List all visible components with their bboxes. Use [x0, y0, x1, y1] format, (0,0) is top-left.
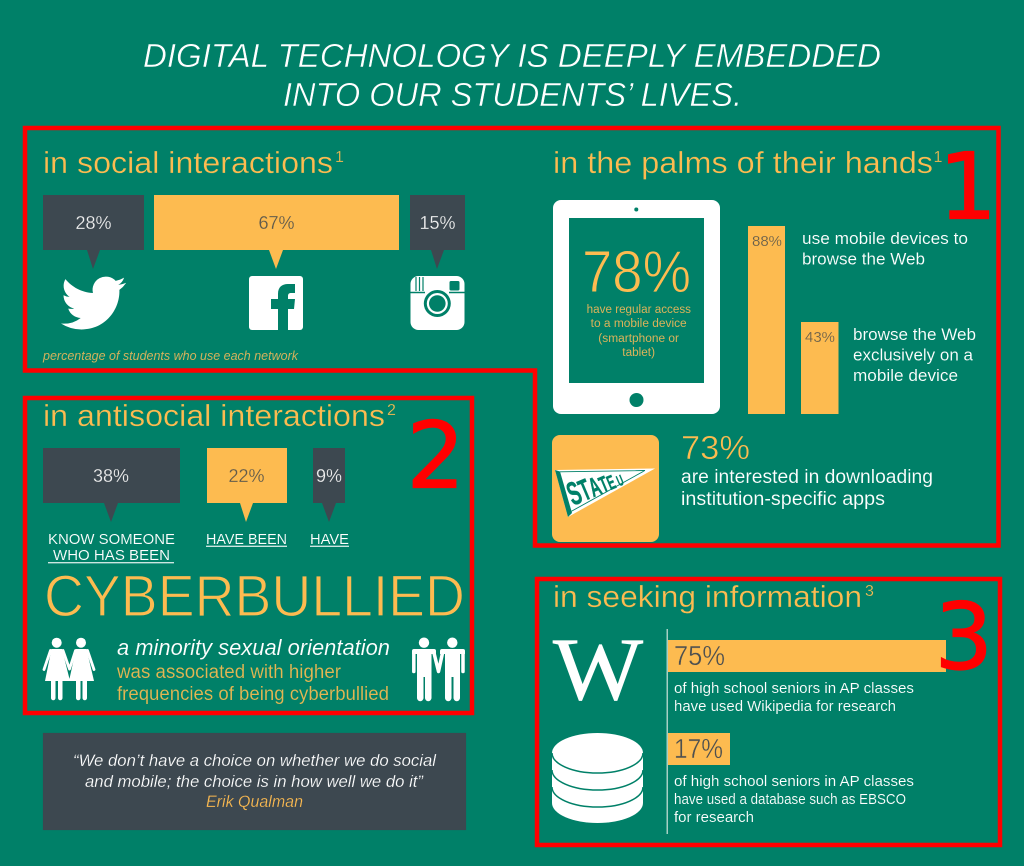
text: database stat: of high school seniors in AP classes: [674, 774, 914, 790]
quote box: and mobile; the choice is in how well we do it”: [85, 772, 424, 791]
bar: 75%: 75%: [674, 640, 725, 671]
text: browse exclusively: mobile device: [853, 366, 958, 385]
quote box: [43, 733, 466, 830]
bar: 88%: [748, 226, 785, 414]
text: browse exclusively: [853, 325, 976, 385]
heading: in social interactions: in social interactions: [43, 145, 333, 180]
text: database stat: have used a database such as EBSCO: [674, 792, 906, 808]
stat: 73% interested in apps: [681, 429, 933, 510]
footnote marker: 2: [387, 402, 396, 419]
icon: database: [552, 733, 643, 823]
quote box: “We don’t have a choice on whether we do social: [73, 751, 437, 770]
text: minority sexual orientation: a minority sexual orientation: [117, 635, 390, 660]
callout: facebook 67%: 67%: [258, 213, 295, 233]
panel: in seeking information: [552, 579, 946, 834]
icon: tablet with 78%: 78%: [582, 239, 691, 305]
annotation: number 2: 2: [406, 402, 465, 510]
text: minority sexual orientation: frequencies of being cyberbullied: [117, 684, 389, 705]
icon: tablet with 78%: tablet): [622, 347, 655, 359]
title: [143, 37, 881, 113]
label: know someone who has been: KNOW SOMEONE: [48, 531, 175, 548]
text: database stat: [674, 774, 914, 826]
title: INTO OUR STUDENTS’ LIVES.: [283, 76, 742, 113]
icon: facebook: [249, 276, 303, 330]
callout: facebook 67%: [154, 195, 399, 269]
stat: 73% interested in apps: are interested in downloading: [681, 466, 933, 488]
callout: 9%: [313, 448, 345, 522]
text: browse exclusively: exclusively on a: [853, 346, 974, 364]
panel: in the palms of their hands: [552, 145, 976, 542]
heading: in seeking information: in seeking information: [553, 579, 862, 614]
callout: 22%: [207, 448, 287, 522]
annotation: red outline 3: [537, 579, 1000, 845]
icon: tablet with 78%: have regular access: [587, 304, 691, 316]
panel: in social interactions: [42, 145, 465, 363]
text: use mobile devices: [802, 229, 968, 268]
quote box: Erik Qualman: [206, 793, 303, 811]
label: know someone who has been: [48, 531, 175, 564]
icon: two women: [44, 638, 94, 700]
icon: instagram: [410, 276, 464, 330]
callout: 38%: 38%: [93, 466, 129, 486]
stat: 73% interested in apps: institution-specific apps: [681, 488, 885, 510]
heading: in antisocial interactions: in antisocial interactions: [43, 398, 385, 433]
callout: 38%: [43, 448, 180, 522]
heading: cyberbullied: CYBERBULLIED: [44, 564, 465, 629]
caption: percentage of students: percentage of students who use each network: [42, 349, 299, 363]
bar: 43%: [801, 322, 838, 414]
icon: tablet with 78%: [553, 200, 720, 414]
panel: in antisocial interactions: [43, 398, 465, 705]
bar: 17%: 17%: [674, 733, 723, 764]
annotation: number 1: 1: [938, 134, 997, 240]
label: have been: HAVE BEEN: [206, 531, 287, 548]
title: DIGITAL TECHNOLOGY IS DEEPLY EMBEDDED: [143, 37, 881, 74]
footnote marker: 1: [335, 149, 344, 166]
icon: tablet with 78%: (smartphone or: [598, 333, 679, 345]
icon: twitter: [61, 277, 126, 329]
callout: instagram 15%: [410, 195, 465, 269]
callout: twitter 28%: 28%: [75, 213, 112, 233]
text: database stat: for research: [674, 810, 754, 826]
text: minority sexual orientation: [116, 635, 390, 705]
callout: instagram 15%: 15%: [419, 213, 456, 233]
text: use mobile devices: browse the Web: [802, 250, 925, 268]
text: minority sexual orientation: was associated with higher: [116, 662, 342, 683]
bar: 43%: 43%: [805, 329, 835, 346]
footnote marker: 1: [934, 149, 942, 166]
icon: tablet with 78%: to a mobile device: [591, 318, 687, 330]
text: browse exclusively: browse the Web: [853, 325, 976, 344]
text: Wikipedia stat: have used Wikipedia for research: [674, 699, 896, 715]
text: Wikipedia stat: [674, 681, 914, 715]
annotation: number 3: 3: [934, 584, 993, 690]
divider line: [666, 629, 668, 834]
callout: 22%: 22%: [228, 466, 265, 486]
icon: State U pennant: [552, 435, 659, 542]
callout: 9%: 9%: [316, 466, 342, 486]
bar: 88%: 88%: [752, 233, 782, 250]
text: Wikipedia stat: of high school seniors in AP classes: [674, 681, 914, 697]
label: know someone who has been: WHO HAS BEEN: [53, 547, 170, 564]
icon: two men: [412, 638, 465, 701]
icon: State U pennant: STATE U: [561, 457, 628, 513]
annotation: red outline 2: [25, 398, 472, 713]
bar: 75%: [668, 640, 946, 672]
label: have: HAVE: [310, 531, 349, 548]
footnote marker: 3: [865, 583, 874, 600]
stat: 73% interested in apps: 73%: [681, 429, 750, 466]
callout: twitter 28%: [43, 195, 144, 269]
text: use mobile devices: use mobile devices to: [802, 229, 968, 248]
annotation: red outline 1: [25, 128, 998, 546]
icon: Wikipedia W: W: [553, 621, 643, 719]
heading: in the palms of their hands: in the palms of their hands: [553, 145, 933, 180]
